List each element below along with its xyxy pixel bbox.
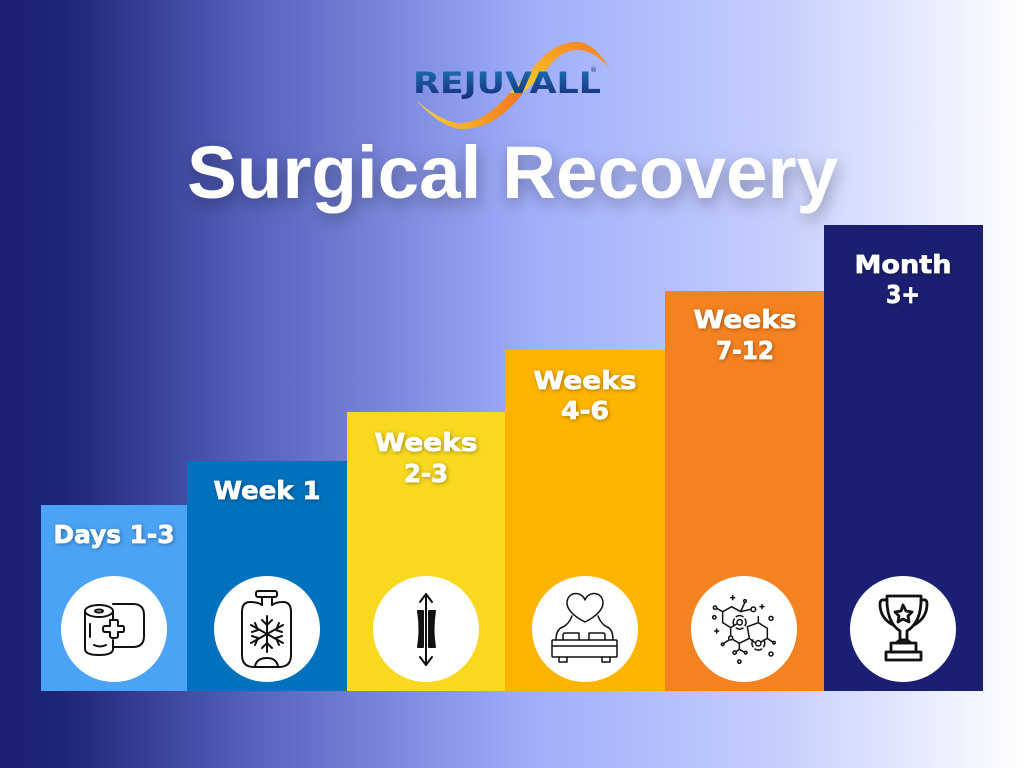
step: Month 3+ xyxy=(824,225,983,691)
icon: bandage roll xyxy=(85,604,144,655)
logo swoosh upper xyxy=(510,42,610,93)
step: Days 1-3 xyxy=(41,505,187,691)
step: Weeks 7-12: 7-12 xyxy=(716,336,774,365)
step: Month 3+: 3+ xyxy=(886,280,920,309)
icon: stretching scar arrow xyxy=(418,594,435,665)
step: Weeks 7-12 xyxy=(665,291,824,691)
step: Month 3+: Month xyxy=(854,250,952,279)
icon: trophy xyxy=(880,596,927,660)
logo swoosh lower xyxy=(417,93,523,129)
step: Weeks 2-3 xyxy=(347,412,505,691)
step: Weeks 4-6: Weeks xyxy=(534,366,636,395)
title: Surgical Recovery xyxy=(187,131,838,214)
step: Weeks 2-3: 2-3 xyxy=(404,459,448,488)
step: Weeks 4-6: 4-6 xyxy=(561,396,609,425)
logo registered mark: ® xyxy=(590,66,597,74)
step: Days 1-3: Days 1-3 xyxy=(54,520,174,549)
icon: bed with heart xyxy=(552,594,617,662)
step: Weeks 4-6 xyxy=(505,350,665,691)
step: Weeks 2-3: Weeks xyxy=(374,428,478,457)
step: Weeks 7-12: Weeks xyxy=(694,305,796,334)
icon: molecules xyxy=(713,596,775,663)
step: Week 1 xyxy=(187,461,347,691)
icon: cold pack xyxy=(242,591,291,667)
step chart xyxy=(41,225,983,691)
logo: Rejuvall xyxy=(413,42,610,129)
logo wordmark: REJUVALL xyxy=(413,66,601,100)
step: Week 1: Week 1 xyxy=(214,476,320,505)
